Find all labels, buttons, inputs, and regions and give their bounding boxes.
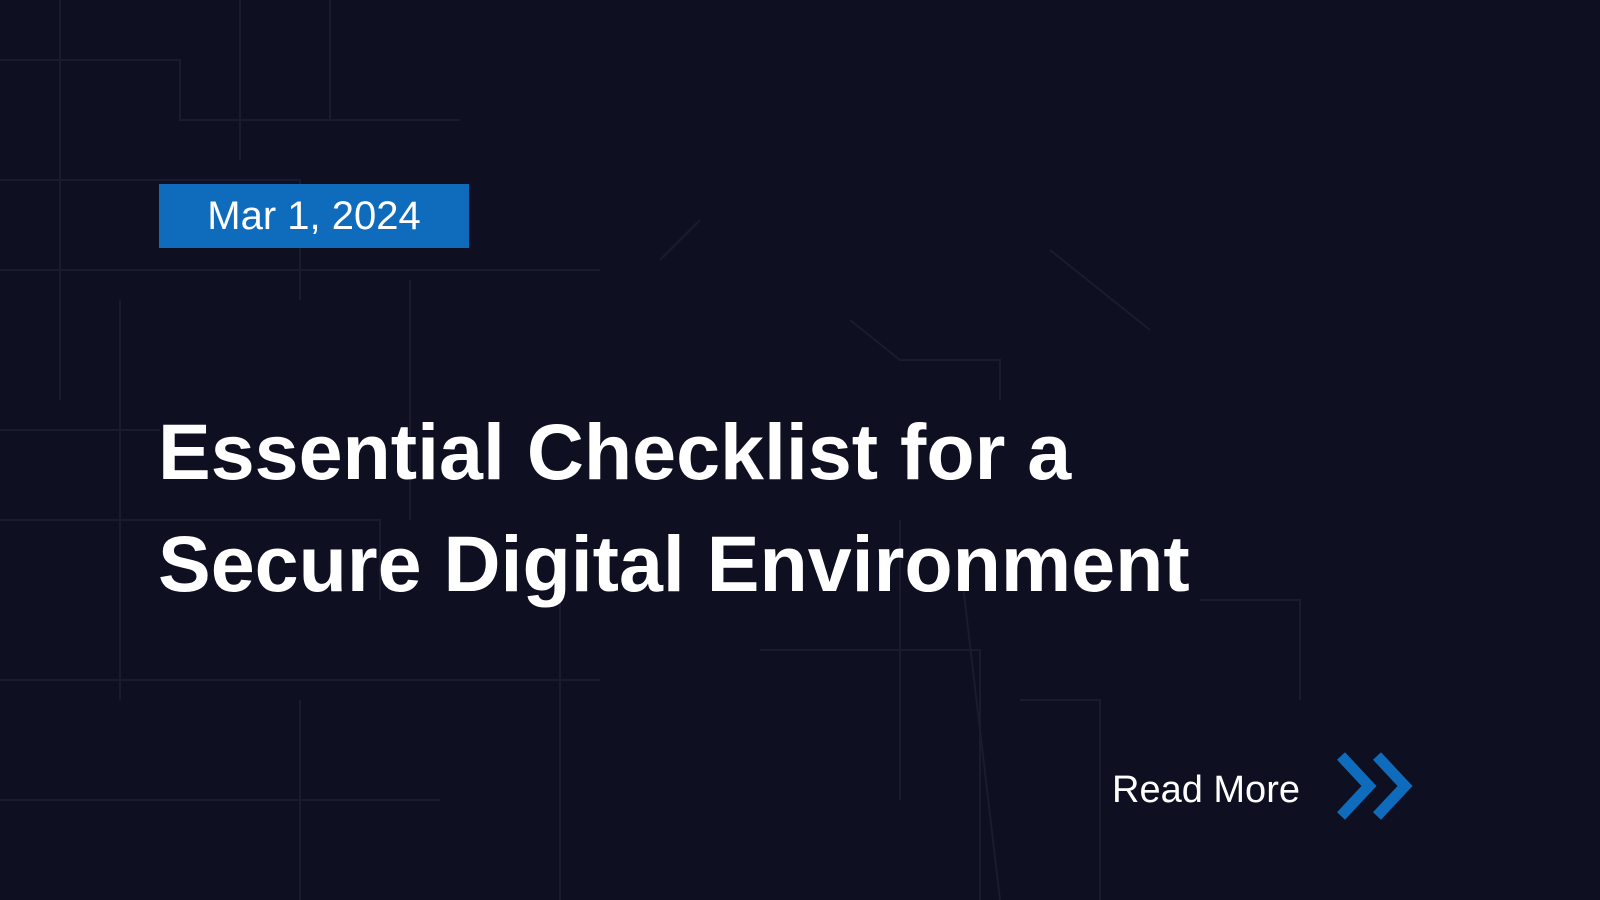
title: Essential Checklist for a — [158, 407, 1071, 496]
date badge: Mar 1, 2024 — [207, 194, 421, 238]
title — [158, 407, 1190, 608]
title: Secure Digital Environment — [158, 519, 1190, 608]
icon: double chevron — [1337, 752, 1412, 820]
date badge — [159, 184, 469, 248]
read more link: Read More — [1112, 769, 1300, 811]
